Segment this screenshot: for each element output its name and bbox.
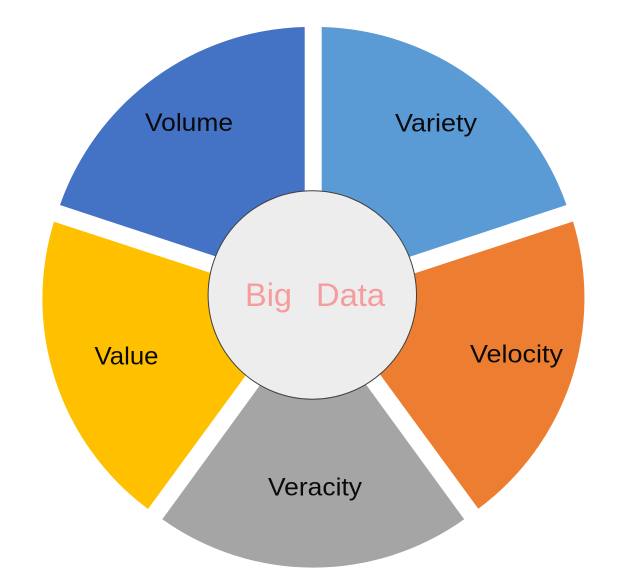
segment: Variety: Variety xyxy=(395,110,478,138)
segment: Veracity xyxy=(162,312,464,568)
segment: Velocity: Velocity xyxy=(470,340,564,368)
segment: Value xyxy=(42,222,299,509)
center circle: Big Data xyxy=(208,191,416,399)
segment: Value: Value xyxy=(94,342,158,370)
segment: Volume xyxy=(60,27,305,286)
center circle: Big Data: Big xyxy=(245,277,292,313)
segment: Volume: Volume xyxy=(145,109,233,137)
segment: Velocity xyxy=(327,222,584,509)
segment: Variety xyxy=(322,27,566,286)
segment: Veracity: Veracity xyxy=(268,474,363,502)
center circle: Big Data: Data xyxy=(316,277,385,313)
